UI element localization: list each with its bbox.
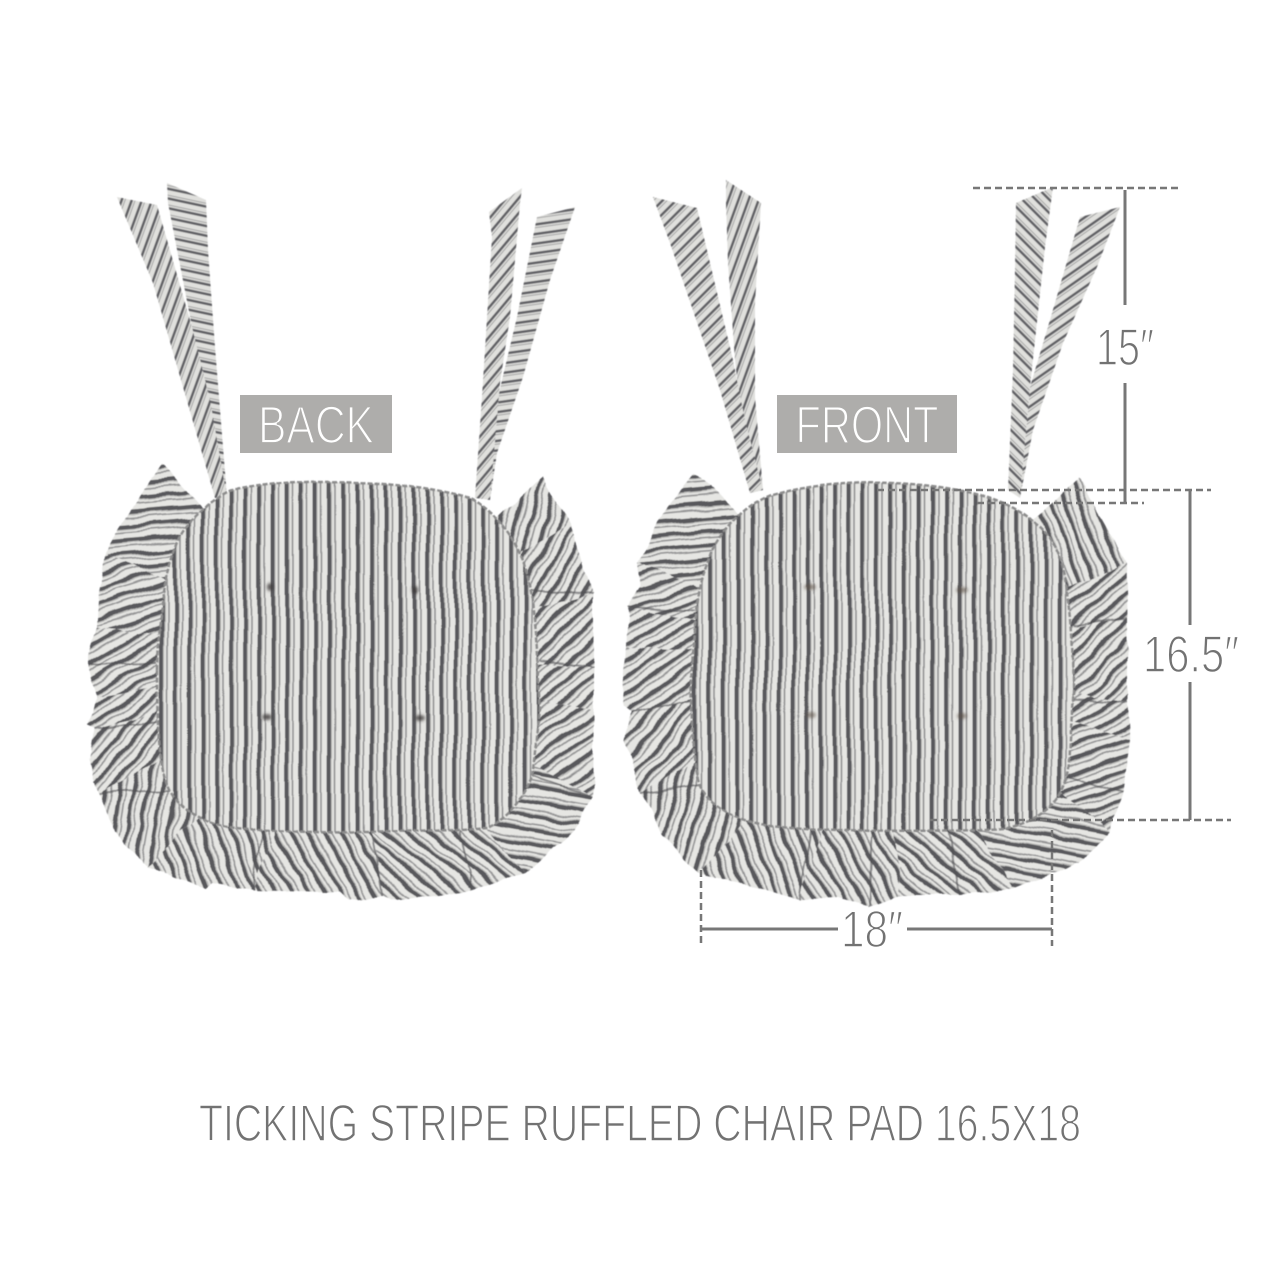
back pad: ruffle: [87, 463, 593, 900]
back pad: tufts: [262, 583, 425, 721]
label: front: FRONT: [796, 396, 938, 455]
back chair pad: [87, 183, 593, 900]
label: back: BACK: [258, 396, 374, 455]
dimension: 16.5 inch depth: 16.5″: [1143, 626, 1239, 684]
back pad: left ties: [117, 183, 227, 498]
front pad: ruffle: [622, 472, 1130, 905]
front pad: right ties: [1008, 187, 1120, 498]
front pad: left ties: [653, 180, 763, 493]
back pad: cushion: [157, 481, 540, 832]
front pad: cushion: [692, 482, 1072, 832]
front pad: tufts: [804, 584, 968, 719]
dimension: 15 inch tie length: 15″: [1096, 319, 1154, 377]
back pad: right ties: [475, 188, 575, 500]
dimension: 18 inch width: 18″: [841, 901, 903, 959]
front chair pad: [622, 180, 1130, 905]
